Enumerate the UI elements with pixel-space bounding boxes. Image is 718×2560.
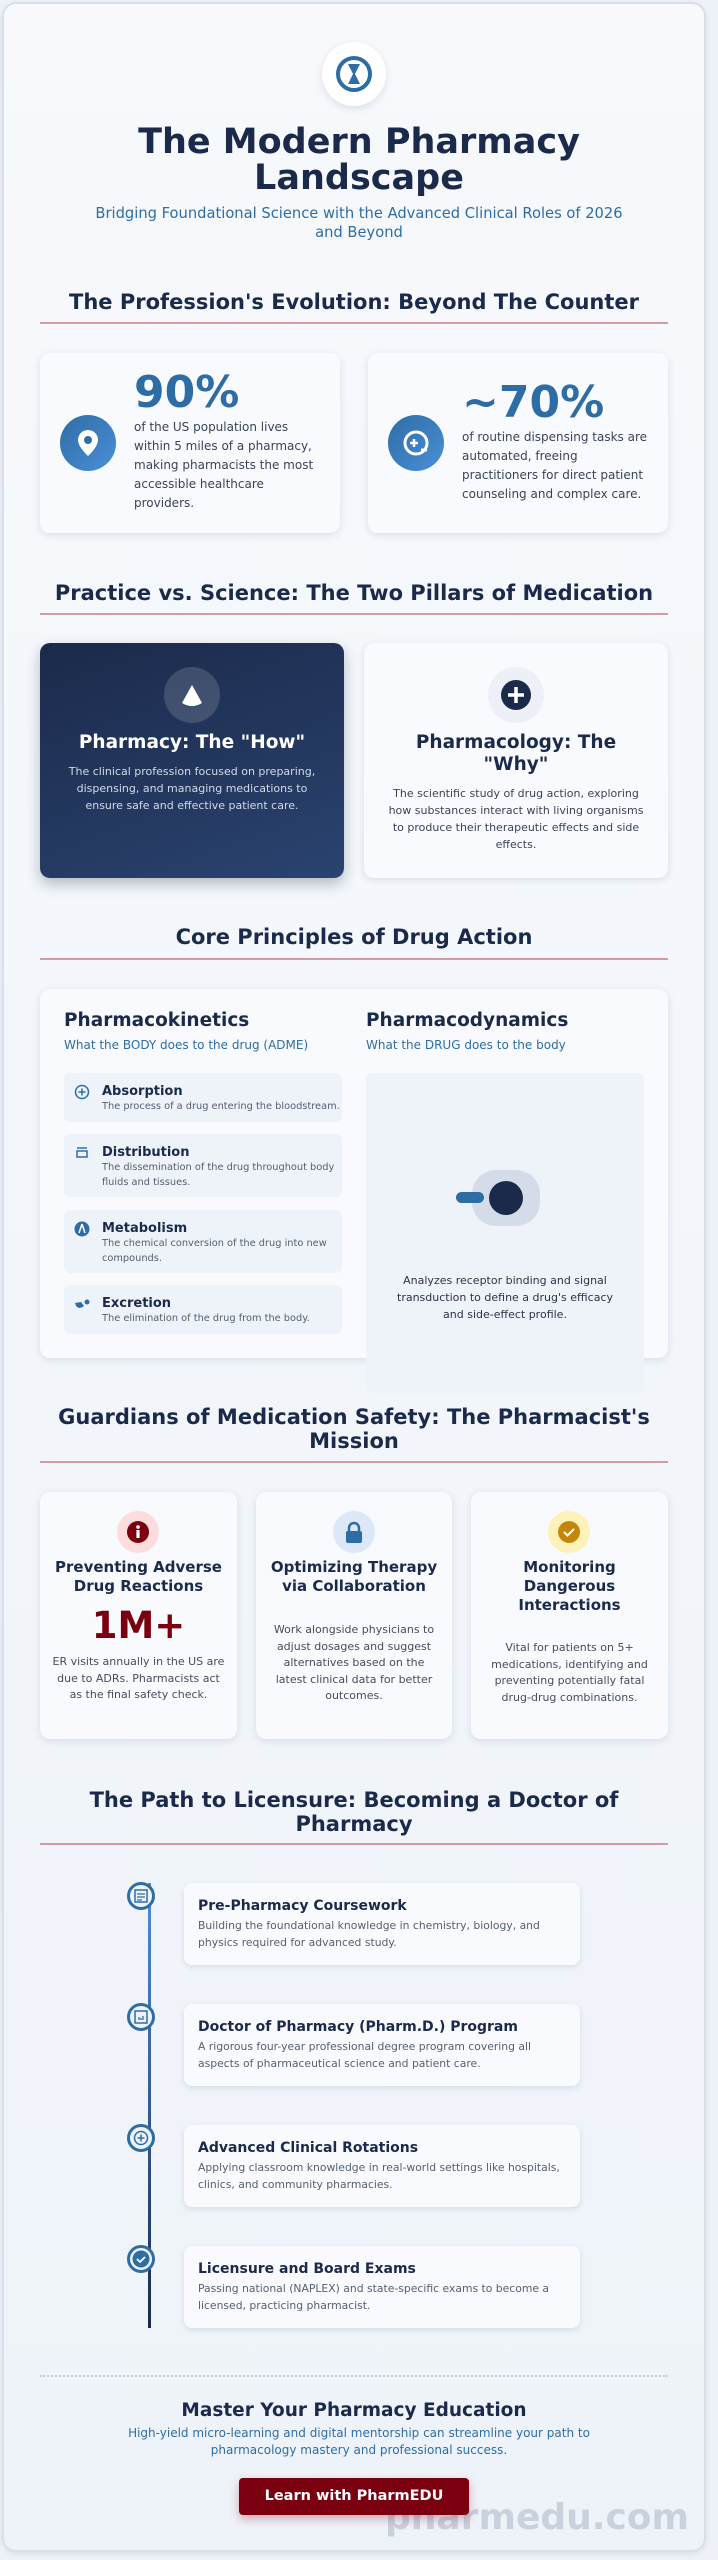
CTA text: High-yield micro-learning and digital mentorship can streamline your path to pharmacology mastery and professional success. (128, 2426, 590, 2457)
card: collaboration: Work alongside physicians to adjust dosages and suggest alternatives based on the latest clinical data for better outcomes. (274, 1623, 434, 1702)
pharmacokinetics heading (64, 1010, 308, 1052)
subtitle: Bridging Foundational Science with the Advanced Clinical Roles of 2026 and Beyond (95, 205, 623, 241)
timeline (127, 1882, 582, 2332)
item: distribution: Distribution (102, 1145, 189, 1160)
stat: 1M+ (92, 1604, 185, 1647)
step 1 (184, 1883, 580, 1965)
stat text (134, 367, 313, 510)
card: interactions: Monitoring Dangerous Interactions (518, 1558, 621, 1614)
step 2 (184, 2004, 580, 2086)
pharmacodynamics heading: What the DRUG does to the body (366, 1038, 566, 1052)
stat text: 90% (134, 367, 239, 418)
card: interactions: Vital for patients on 5+ medications, identifying and preventing potentially fatal drug-drug combinations. (491, 1641, 648, 1704)
panel: pharmacy how (40, 643, 344, 878)
heading: safety: Guardians of Medication Safety: The Pharmacist's Mission (58, 1405, 650, 1453)
stat text: ~70% (462, 377, 604, 428)
title (138, 122, 580, 198)
icon: check (548, 1511, 590, 1553)
pharmacodynamics heading: Pharmacodynamics (366, 1010, 568, 1031)
CTA button: Learn with PharmEDU (265, 2488, 443, 2504)
step 3 (184, 2125, 580, 2207)
node 4 (127, 2245, 155, 2273)
item: absorption: Absorption (102, 1084, 183, 1099)
icon: plus (488, 667, 544, 723)
title: Pharmacology: The "Why" (416, 732, 616, 775)
text: The scientific study of drug action, exploring how substances interact with living organisms to produce their therapeutic effects and side effects. (389, 787, 643, 851)
panel: core principles (40, 989, 668, 1358)
text: Analyzes receptor binding and signal transduction to define a drug's efficacy and side-effect profile. (397, 1274, 613, 1321)
receptor illustration box (366, 1073, 644, 1393)
heading: evolution: The Profession's Evolution: Beyond The Counter (69, 290, 639, 314)
item: excretion (64, 1285, 342, 1334)
card: adverse reactions (40, 1492, 237, 1739)
panel: pharmacology why (364, 643, 668, 878)
item: excretion: The elimination of the drug from the body. (102, 1313, 310, 1324)
pharmacodynamics heading (366, 1010, 568, 1052)
step 1: Building the foundational knowledge in chemistry, biology, and physics required for advanced study. (198, 1919, 540, 1948)
stat card: 90% (40, 353, 340, 533)
pharmacokinetics heading: Pharmacokinetics (64, 1010, 249, 1031)
node 2 (127, 2003, 155, 2031)
icon: support (388, 415, 444, 471)
title: The Modern Pharmacy (138, 122, 580, 162)
icon: location (60, 415, 116, 471)
heading: licensure: The Path to Licensure: Becoming a Doctor of Pharmacy (90, 1788, 618, 1836)
item: metabolism (64, 1210, 342, 1273)
watermark: pharmedu.com (385, 2497, 689, 2538)
heading: pillars: Practice vs. Science: The Two Pillars of Medication (55, 581, 653, 605)
icon: lock (333, 1511, 375, 1553)
text: The clinical profession focused on preparing, dispensing, and managing medications to ensure safe and effective patient care. (69, 765, 315, 812)
CTA button (239, 2478, 469, 2515)
stat text: of routine dispensing tasks are automated, freeing practitioners for direct patient counseling and complex care. (462, 430, 647, 501)
item: metabolism: The chemical conversion of the drug into new compounds. (102, 1238, 327, 1264)
card: adverse reactions: Preventing Adverse Drug Reactions (55, 1558, 222, 1595)
step 2: Doctor of Pharmacy (Pharm.D.) Program (198, 2019, 518, 2035)
card: collaboration (256, 1492, 452, 1739)
icon: receptor (456, 1170, 540, 1226)
item: distribution: The dissemination of the drug throughout body fluids and tissues. (102, 1162, 334, 1188)
step 4 (184, 2246, 580, 2328)
icon: info (117, 1511, 159, 1553)
stat text (462, 377, 647, 501)
item: metabolism: Metabolism (102, 1221, 187, 1236)
item: excretion: Excretion (102, 1296, 171, 1311)
card: collaboration: Optimizing Therapy via Collaboration (271, 1558, 437, 1595)
card: interactions (471, 1492, 668, 1739)
item: absorption: The process of a drug entering the bloodstream. (102, 1101, 340, 1112)
heading: core principles: Core Principles of Drug Action (176, 925, 532, 949)
step 1: Pre-Pharmacy Coursework (198, 1898, 407, 1914)
stat text: of the US population lives within 5 miles of a pharmacy, making pharmacists the most accessible healthcare providers. (134, 420, 313, 510)
card: adverse reactions: ER visits annually in the US are due to ADRs. Pharmacists act as the final safety check. (53, 1655, 224, 1701)
step 4: Passing national (NAPLEX) and state-specific exams to become a licensed, practicing pharmacist. (198, 2282, 549, 2312)
CTA heading: Master Your Pharmacy Education (181, 2400, 527, 2421)
step 2: A rigorous four-year professional degree program covering all aspects of pharmaceutical science and patient care. (198, 2040, 531, 2070)
stat card: 70% (368, 353, 668, 533)
pharmacokinetics heading: What the BODY does to the drug (ADME) (64, 1038, 308, 1052)
title: Landscape (254, 158, 464, 198)
item: distribution (64, 1134, 342, 1197)
step 3: Advanced Clinical Rotations (198, 2140, 418, 2156)
node 1 (127, 1882, 155, 1910)
title: Pharmacy: The "How" (79, 732, 305, 753)
step 4: Licensure and Board Exams (198, 2261, 416, 2277)
timeline line (148, 1883, 151, 2328)
item: absorption (64, 1073, 342, 1122)
step 3: Applying classroom knowledge in real-world settings like hospitals, clinics, and community pharmacies. (198, 2161, 560, 2190)
icon: mortar (164, 667, 220, 723)
node 3 (127, 2124, 155, 2152)
logo icon (322, 42, 386, 106)
